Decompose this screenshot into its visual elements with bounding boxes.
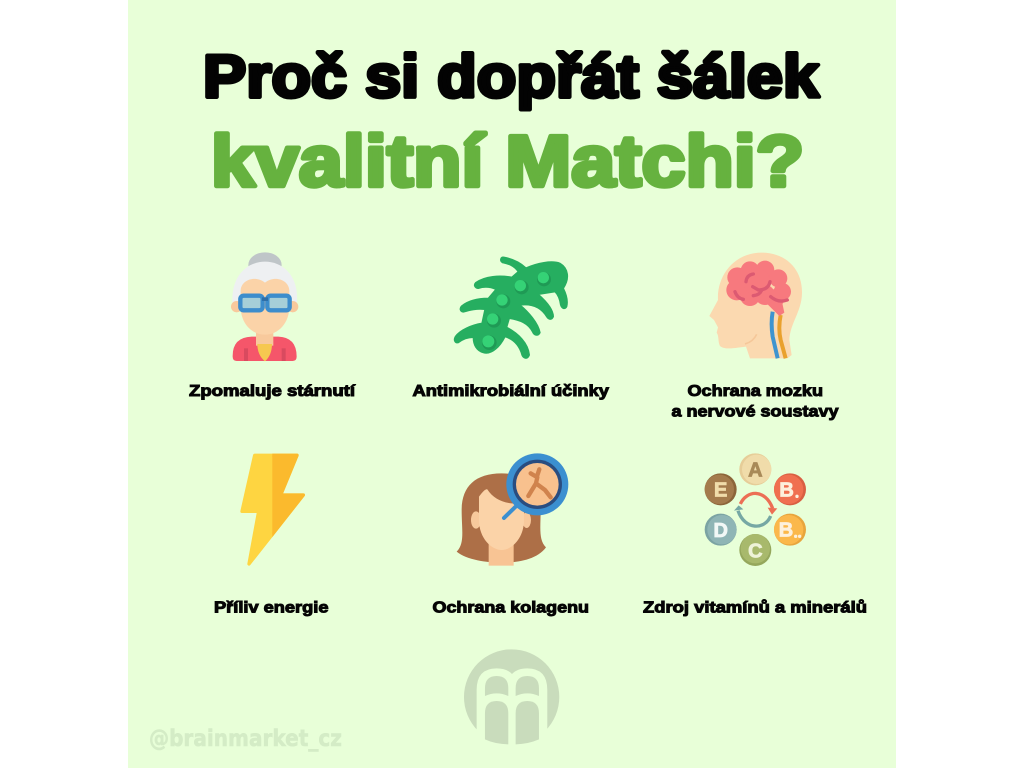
icon: vitamins cycle: B [779, 520, 793, 542]
icon: woman with magnifying glass [457, 453, 568, 566]
icon: vitamins cycle: E [714, 480, 727, 502]
logo: brainmarket emblem [464, 649, 559, 750]
icon: vitamins cycle [705, 453, 806, 566]
icon: bacteria [454, 257, 567, 358]
label: Ochrana mozku a nervové soustavy: Ochrana mozku [688, 383, 823, 400]
title: line two: kvalitní Matchi? [211, 122, 804, 202]
label: Ochrana mozku a nervové soustavy [672, 383, 839, 420]
title: line one: Proč si dopřát šálek [203, 43, 820, 110]
label: Ochrana kolagenu: Ochrana kolagenu [432, 600, 589, 616]
label: Příliv energie: Příliv energie [214, 600, 329, 616]
watermark: handle: @brainmarket_cz [149, 726, 342, 752]
icon: elderly woman [231, 252, 298, 361]
icon: lightning bolt [242, 455, 303, 564]
icon: vitamins cycle: B [779, 480, 794, 502]
panel: background [128, 0, 896, 768]
icon: vitamins cycle: A [748, 460, 763, 482]
icon: vitamins cycle: D [713, 520, 728, 542]
label: Ochrana mozku a nervové soustavy: a nervové soustavy [672, 404, 839, 420]
label: Antimikrobiální účinky: Antimikrobiální účinky [412, 383, 609, 400]
label: Zpomaluje stárnutí: Zpomaluje stárnutí [189, 383, 356, 400]
label: Zdroj vitamínů a minerálů: Zdroj vitamínů a minerálů [643, 600, 867, 616]
icon: vitamins cycle: C [748, 540, 763, 562]
icon: head with brain [709, 253, 802, 358]
